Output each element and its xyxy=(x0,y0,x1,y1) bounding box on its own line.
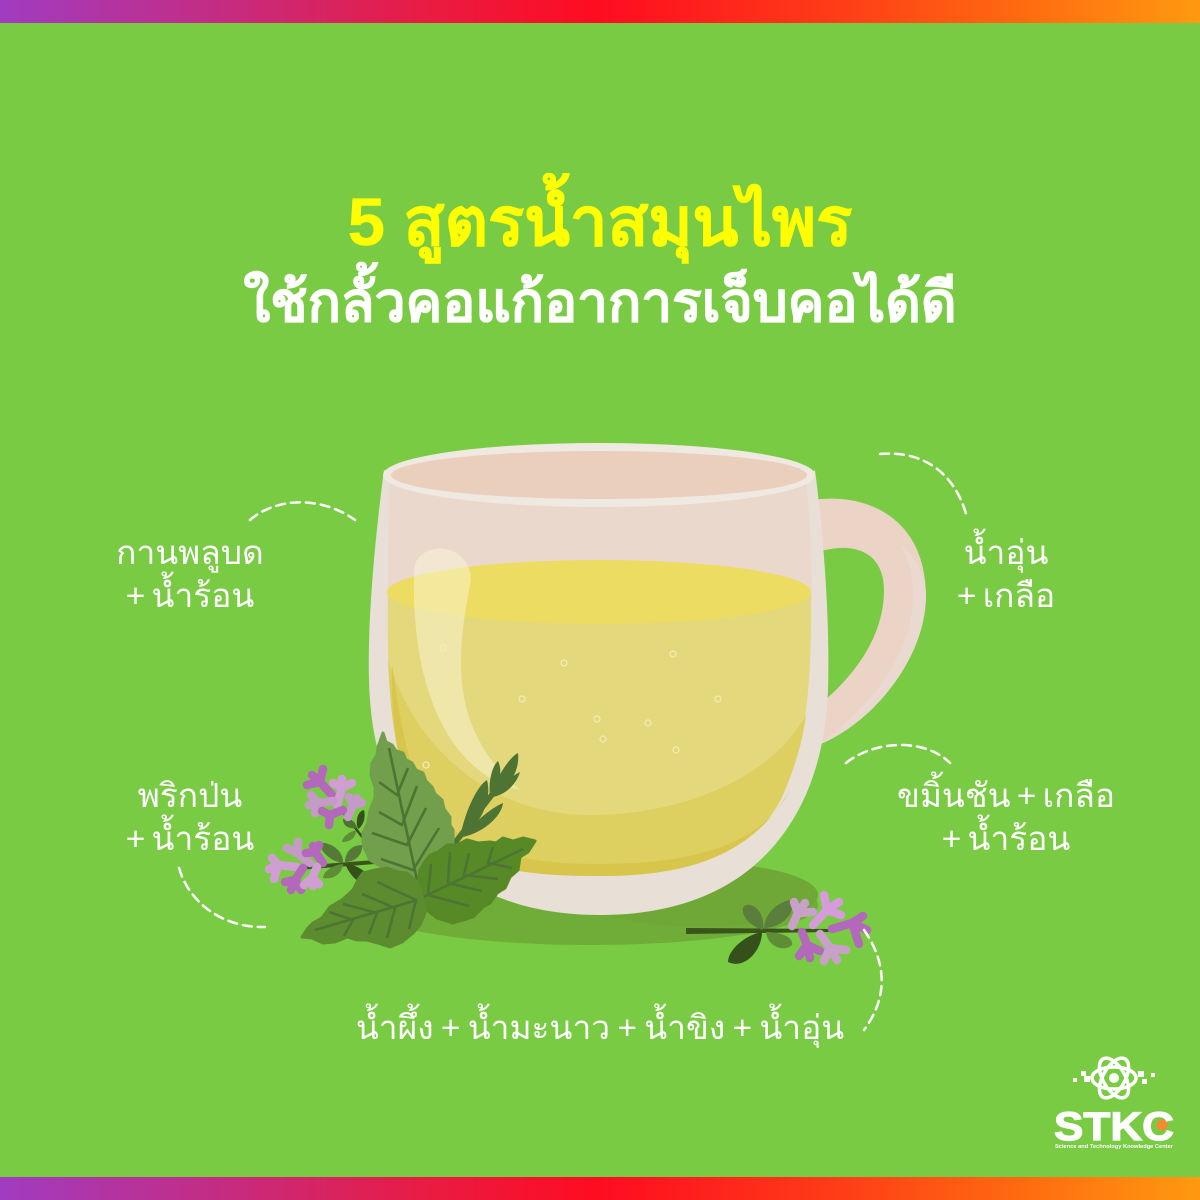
STKC logo: Science and Technology Knowledge Center xyxy=(1055,1144,1174,1150)
label: lower left xyxy=(126,778,254,858)
lower-right flower sprig xyxy=(686,895,867,964)
dashed connector: top left xyxy=(250,502,355,520)
STKC logo xyxy=(1054,1053,1174,1150)
bubbles xyxy=(423,645,721,768)
label: top right xyxy=(957,528,1055,615)
label: bottom: น้ำผึ้ง + น้ำมะนาว + น้ำขิง + น้ำอุ่น xyxy=(356,1010,844,1047)
mint leaf right xyxy=(417,838,535,923)
STKC logo: STKC xyxy=(1054,1105,1174,1149)
cup rim xyxy=(383,443,815,507)
title xyxy=(243,172,957,333)
label: lower right: + น้ำร้อน xyxy=(942,821,1070,858)
title: ใช้กลั้วคอแก้อาการเจ็บคอได้ดี xyxy=(243,271,957,333)
herb: rosemary sprig xyxy=(452,753,520,846)
tea liquid xyxy=(388,592,811,876)
cup handle xyxy=(812,499,926,745)
glass highlight xyxy=(414,549,520,790)
cup shadow xyxy=(362,863,818,945)
label: top left: กานพลูบด xyxy=(116,535,264,572)
label: top right: น้ำอุ่น xyxy=(964,535,1048,572)
cup body xyxy=(369,443,828,915)
top gradient bar xyxy=(0,0,1200,23)
title: 5 สูตรน้ำสมุนไพร xyxy=(348,185,852,260)
dashed connector: lower right xyxy=(846,745,950,763)
mint leaf left xyxy=(302,868,425,947)
label: lower left: พริกป่น xyxy=(138,778,242,815)
label: lower left: + น้ำร้อน xyxy=(126,821,254,858)
dashed connector: bottom xyxy=(864,930,882,1030)
label: top left xyxy=(116,535,264,615)
label: top right: + เกลือ xyxy=(957,578,1055,615)
label: lower right: ขมิ้นชัน + เกลือ xyxy=(897,778,1115,815)
bottom gradient bar xyxy=(0,1177,1200,1200)
mint leaf top xyxy=(363,733,453,880)
dashed connector: lower left xyxy=(179,868,265,927)
label: top left: + น้ำร้อน xyxy=(126,578,254,615)
label: lower right xyxy=(897,772,1115,858)
left flower sprig xyxy=(269,769,375,890)
dashed connector: top right xyxy=(880,454,966,514)
